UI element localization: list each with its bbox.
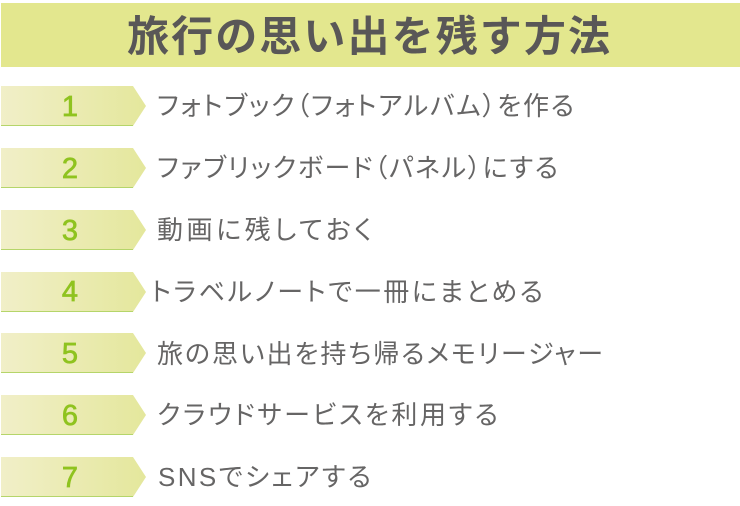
list item 4: トラベルノートで一冊にまとめる: [151, 277, 543, 307]
list item 7: 7: [62, 462, 78, 494]
list item 3: [1, 210, 372, 250]
list item 2: 2: [62, 153, 78, 185]
list item 3: 動画に残しておく: [157, 215, 372, 245]
title: 旅行の思い出を残す方法: [127, 13, 610, 60]
list item 3: 3: [62, 215, 78, 247]
title banner: [1, 3, 740, 67]
list item 5: 旅の思い出を持ち帰るメモリージャー: [157, 339, 603, 369]
list item 7: [1, 457, 371, 497]
list item 4: 4: [62, 276, 78, 308]
list item 1: フォトブック（フォトアルバム）を作る: [157, 91, 574, 121]
list item 5: 5: [62, 338, 78, 370]
list item 6: クラウドサービスを利用する: [157, 400, 498, 430]
list item 2: ファブリックボード（パネル）にする: [157, 153, 558, 183]
list item 6: 6: [62, 400, 78, 432]
list item 5: [1, 333, 603, 373]
list item 2: [1, 148, 558, 188]
list item 4: [1, 272, 543, 312]
list item 1: [1, 86, 574, 126]
list item 7: SNSでシェアする: [158, 462, 371, 492]
list item 1: 1: [62, 91, 78, 123]
list item 6: [1, 395, 498, 435]
